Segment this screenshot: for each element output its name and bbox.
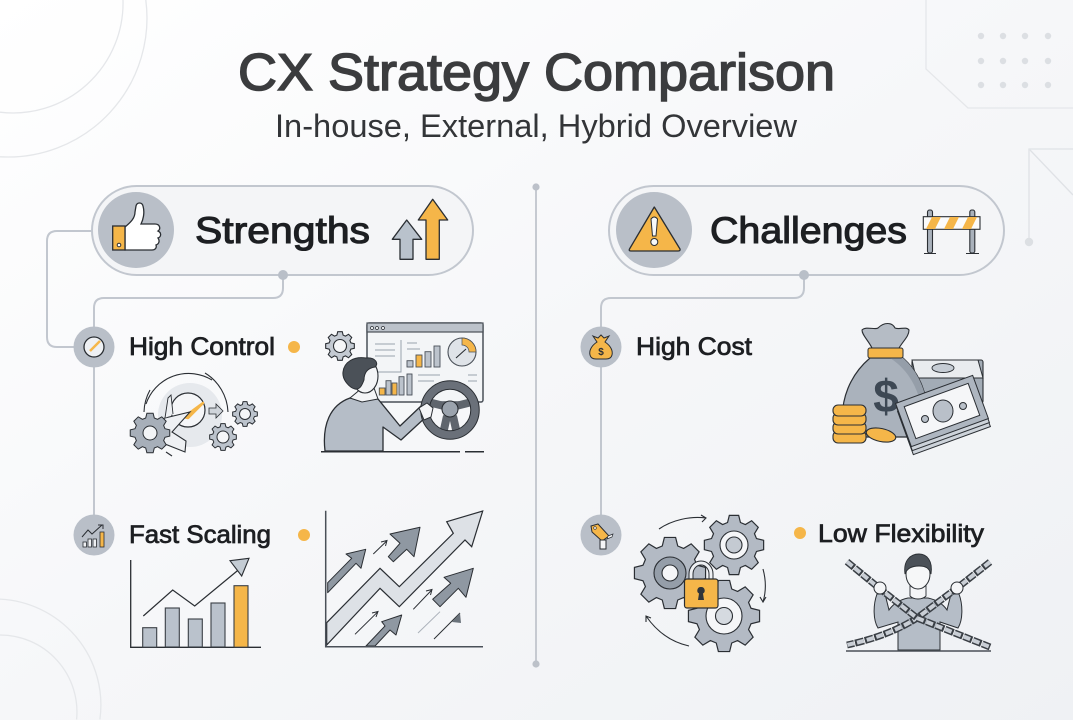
connector dot xyxy=(278,270,288,280)
heading: challenges: Challenges xyxy=(710,210,907,251)
illustration: money bag and cash xyxy=(833,324,990,455)
item: fast scaling xyxy=(74,511,483,647)
label: low flexibility: Low Flexibility xyxy=(818,520,985,548)
illustration: locked gears xyxy=(634,515,766,652)
icon: thumbs up xyxy=(98,192,174,268)
icon: warning triangle xyxy=(616,192,692,268)
icon: up arrows xyxy=(392,199,448,259)
illustration: control dial with gears xyxy=(130,373,257,456)
item: high cost xyxy=(580,324,990,455)
icon: money bag badge xyxy=(580,326,622,368)
label: high control: High Control xyxy=(129,333,275,361)
header pill: strengths xyxy=(92,186,473,275)
illustration: chained person xyxy=(846,554,991,651)
icon: price tag badge xyxy=(580,514,622,556)
icon: trend badge xyxy=(74,514,114,556)
accent dot xyxy=(298,529,310,541)
item: low flexibility xyxy=(580,514,991,652)
title: CX Strategy Comparison xyxy=(238,44,835,102)
panel: strengths xyxy=(47,186,484,647)
bar chart: growth xyxy=(131,558,261,647)
label: fast scaling: Fast Scaling xyxy=(129,521,271,549)
illustration: money bag and cash: $ xyxy=(873,370,899,422)
icon: road barrier xyxy=(923,210,980,254)
icon: money bag badge: $ xyxy=(598,347,604,358)
header pill: challenges xyxy=(609,186,1004,275)
icon: gauge badge xyxy=(74,326,114,368)
connector lines: challenges xyxy=(601,275,804,516)
chart: rising arrows xyxy=(326,511,483,647)
item: high control xyxy=(74,323,484,456)
center divider xyxy=(532,183,540,668)
illustration: person steering dashboard xyxy=(321,323,484,452)
accent dot xyxy=(794,527,806,539)
connector lines: strengths xyxy=(47,231,283,516)
connector dot xyxy=(799,270,809,280)
heading: strengths: Strengths xyxy=(195,210,370,251)
subtitle: In-house, External, Hybrid Overview xyxy=(275,108,798,144)
panel: challenges xyxy=(580,186,1004,652)
accent dot xyxy=(288,341,300,353)
label: high cost: High Cost xyxy=(636,333,752,361)
